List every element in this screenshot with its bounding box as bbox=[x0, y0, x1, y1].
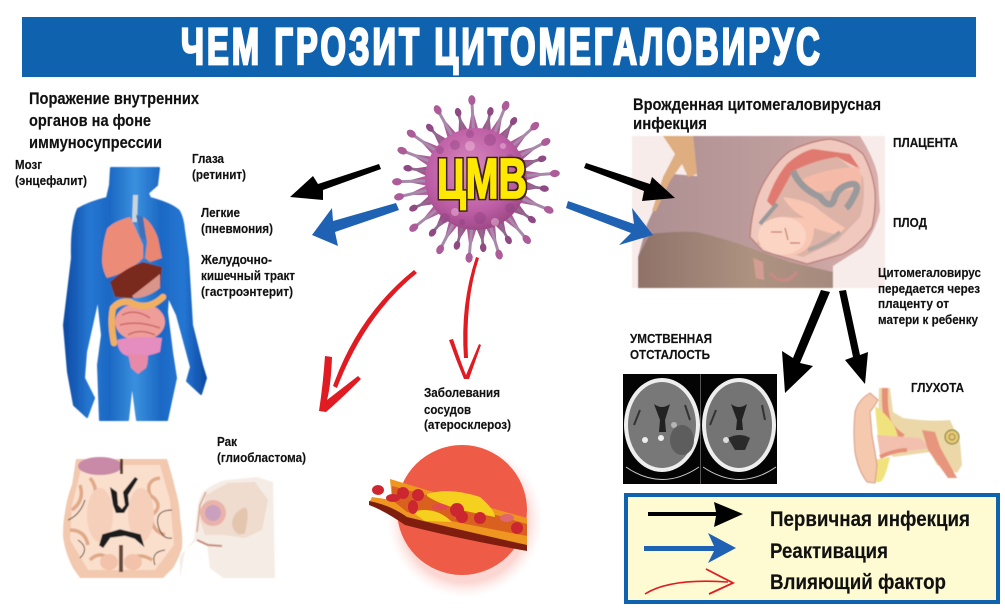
text: transmission note: передается через bbox=[878, 281, 980, 296]
label: mental retardation: ОТСТАЛОСТЬ bbox=[630, 347, 710, 362]
label: eyes: (ретинит) bbox=[192, 167, 246, 182]
label: brain: (энцефалит) bbox=[15, 173, 87, 188]
text: transmission note: плаценту от bbox=[878, 296, 949, 311]
organs: liver and stomach bbox=[110, 262, 162, 298]
heading: congenital infection: инфекция bbox=[633, 114, 707, 133]
cholesterol plaques bbox=[427, 491, 495, 517]
label: vascular disease: Заболевания bbox=[424, 385, 500, 400]
red blood cells bbox=[372, 485, 523, 534]
legend: influencing factor bbox=[645, 569, 946, 594]
label: brain: Мозг bbox=[15, 157, 43, 172]
organ labels bbox=[15, 151, 295, 299]
vessel wall bbox=[369, 479, 527, 550]
label: fetus: ПЛОД bbox=[893, 215, 928, 230]
legend: primary infection: Первичная инфекция bbox=[770, 508, 970, 531]
illustration: ear anatomy bbox=[854, 388, 962, 483]
text: transmission note bbox=[878, 265, 981, 327]
label: vascular disease: (атеросклероз) bbox=[424, 417, 511, 432]
fetus bbox=[758, 197, 845, 256]
label: lungs: Легкие bbox=[201, 205, 240, 220]
legend: primary infection bbox=[648, 502, 970, 531]
label: mental retardation: УМСТВЕННАЯ bbox=[630, 331, 712, 346]
label: lungs: (пневмония) bbox=[201, 221, 273, 236]
label: brain bbox=[15, 157, 87, 188]
title banner bbox=[22, 17, 976, 77]
legend: reactivation: Реактивация bbox=[770, 540, 888, 563]
red arrow: to cancer bbox=[319, 270, 417, 412]
heading: internal organ damage: Поражение внутренних bbox=[29, 89, 199, 108]
label: cancer: (глиобластома) bbox=[217, 450, 306, 465]
label: cancer: Рак bbox=[217, 434, 237, 449]
label: cancer bbox=[217, 434, 306, 465]
legend: reactivation bbox=[644, 533, 888, 563]
text: transmission note: Цитомегаловирус bbox=[878, 265, 981, 280]
arrow: black to fetus bbox=[584, 163, 675, 201]
heading: congenital infection: Врожденная цитомегаловирусная bbox=[633, 95, 881, 114]
arrow: blue to fetus bbox=[566, 201, 653, 245]
label: gastrointestinal tract: Желудочно- bbox=[200, 252, 272, 267]
label: gastrointestinal tract: (гастроэнтерит) bbox=[201, 284, 293, 299]
label: gastrointestinal tract bbox=[200, 252, 295, 299]
illustration: atherosclerotic vessel bbox=[369, 442, 543, 598]
heading: internal organ damage: органов на фоне bbox=[29, 111, 151, 130]
virus label: ЦМВ bbox=[437, 147, 527, 211]
umbilical cord bbox=[793, 171, 857, 208]
label: deafness: ГЛУХОТА bbox=[911, 380, 965, 395]
uterus bbox=[750, 139, 875, 264]
label: vascular disease: сосудов bbox=[424, 402, 471, 417]
arrow: black to mental retardation bbox=[782, 290, 830, 393]
scan 2 bbox=[702, 378, 776, 480]
heading: congenital infection bbox=[633, 95, 881, 133]
legend: influencing factor: Влияющий фактор bbox=[770, 571, 946, 594]
illustration: pregnant woman and fetus bbox=[632, 136, 885, 288]
organs: lungs bbox=[102, 215, 162, 278]
label: gastrointestinal tract: кишечный тракт bbox=[201, 268, 295, 283]
label: eyes bbox=[192, 151, 246, 182]
label: vascular disease bbox=[424, 385, 511, 432]
text: transmission note: матери к ребенку bbox=[878, 312, 979, 327]
virus: CMV bbox=[392, 95, 560, 263]
illustration: brain section bbox=[63, 457, 182, 578]
hand bbox=[652, 136, 697, 211]
CT brain scans bbox=[623, 374, 777, 484]
title text: ЧЕМ ГРОЗИТ ЦИТОМЕГАЛОВИРУС bbox=[181, 19, 820, 76]
illustration: head with glioblastoma bbox=[180, 477, 275, 578]
arrow: black to deafness bbox=[839, 290, 868, 384]
cervix bbox=[753, 258, 764, 280]
arrow: black to organs bbox=[290, 164, 381, 200]
label: placenta: ПЛАЦЕНТА bbox=[893, 135, 959, 150]
label: lungs bbox=[201, 205, 273, 236]
arrow: blue to organs bbox=[312, 203, 399, 246]
heading: internal organ damage bbox=[29, 89, 199, 152]
organs: colon and small intestine bbox=[112, 297, 165, 374]
heading: internal organ damage: иммуносупрессии bbox=[29, 133, 162, 152]
legend panel bbox=[626, 495, 998, 602]
scan 1 bbox=[624, 378, 700, 480]
human body with organs bbox=[64, 168, 206, 420]
label: mental retardation bbox=[630, 331, 712, 362]
red arrow: to vessels bbox=[449, 257, 481, 379]
label: eyes: Глаза bbox=[192, 151, 225, 166]
